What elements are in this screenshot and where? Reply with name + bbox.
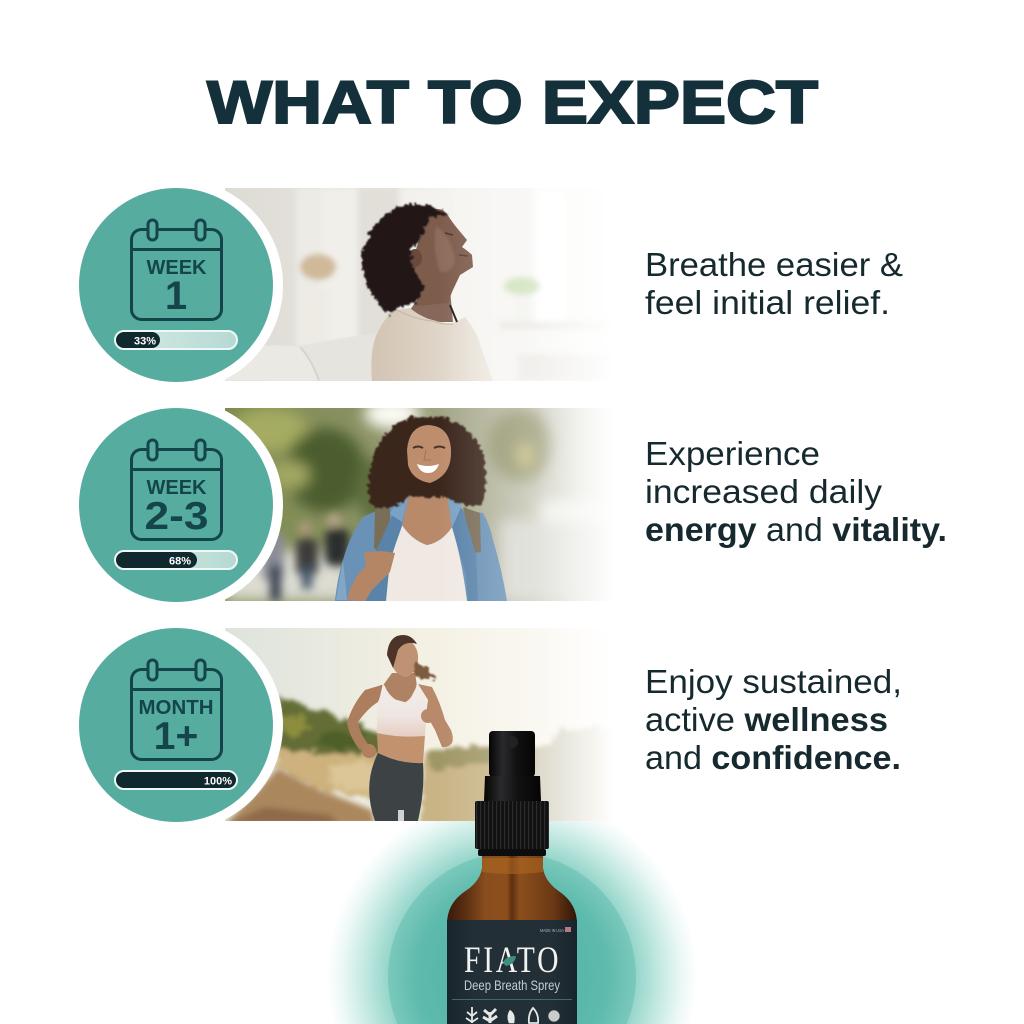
infographic: what to expect (79, 80, 945, 1024)
calendar label: month 1+: 1+ (154, 715, 198, 758)
text: week 2-3 benefit: energy and vitality. (645, 511, 947, 548)
calendar label: month 1+ (138, 697, 214, 758)
calendar label: week 2-3: WEEK (146, 477, 207, 499)
text: month 1+ benefit (645, 663, 902, 776)
bottle label: MADE IN USA (540, 928, 564, 933)
progress bar 33% (115, 331, 237, 349)
text: month 1+ benefit: active wellness (645, 701, 888, 738)
woman with head tilted back (362, 204, 493, 381)
icon: calendar (132, 660, 222, 760)
bottle label: Deep Breath Sprey (464, 977, 560, 993)
text: month 1+ benefit: Enjoy sustained, (645, 663, 902, 700)
amber glass (447, 856, 577, 1024)
photo: woman walking outdoors (225, 399, 615, 601)
text: week 1 benefit (645, 246, 903, 321)
step 3 month badge (71, 619, 283, 831)
herb icons (466, 1007, 560, 1023)
text: week 1 benefit: feel initial relief. (645, 284, 890, 321)
spray cap (475, 731, 549, 856)
calendar label: month 1+: MONTH (138, 697, 214, 719)
product bottle (447, 731, 577, 1024)
step 2 week badge (71, 399, 283, 611)
icon: calendar (132, 220, 222, 320)
title: WHAT TO EXPECT (207, 69, 818, 136)
calendar label: week 2-3 (144, 477, 208, 538)
calendar label: week 1: WEEK (146, 257, 207, 279)
progress bar 33%: 33% (134, 336, 156, 348)
walking woman (335, 416, 507, 601)
icon: calendar (132, 440, 222, 540)
progress bar 68% (115, 551, 237, 569)
photo: woman running on a trail (225, 628, 620, 825)
text: week 2-3 benefit (645, 435, 947, 548)
text: week 2-3 benefit: increased daily (645, 473, 883, 510)
sofa (225, 337, 356, 381)
calendar label: week 2-3: 2-3 (144, 495, 208, 538)
progress bar 100% (115, 771, 237, 789)
text: week 2-3 benefit: Experience (645, 435, 820, 472)
progress bar 100%: 100% (204, 776, 232, 788)
calendar label: week 1: 1 (165, 274, 187, 318)
text: week 1 benefit: Breathe easier & (645, 246, 903, 283)
bottle label: FIATO (464, 940, 561, 981)
photo: woman breathing indoors (225, 188, 615, 381)
step 1 week badge (71, 179, 283, 391)
bottle label (447, 920, 577, 1024)
runner (347, 635, 453, 821)
progress bar 68%: 68% (169, 556, 191, 568)
text: month 1+ benefit: and confidence. (645, 739, 901, 776)
calendar label: week 1 (146, 257, 207, 318)
teal glow behind bottle (325, 821, 700, 1024)
